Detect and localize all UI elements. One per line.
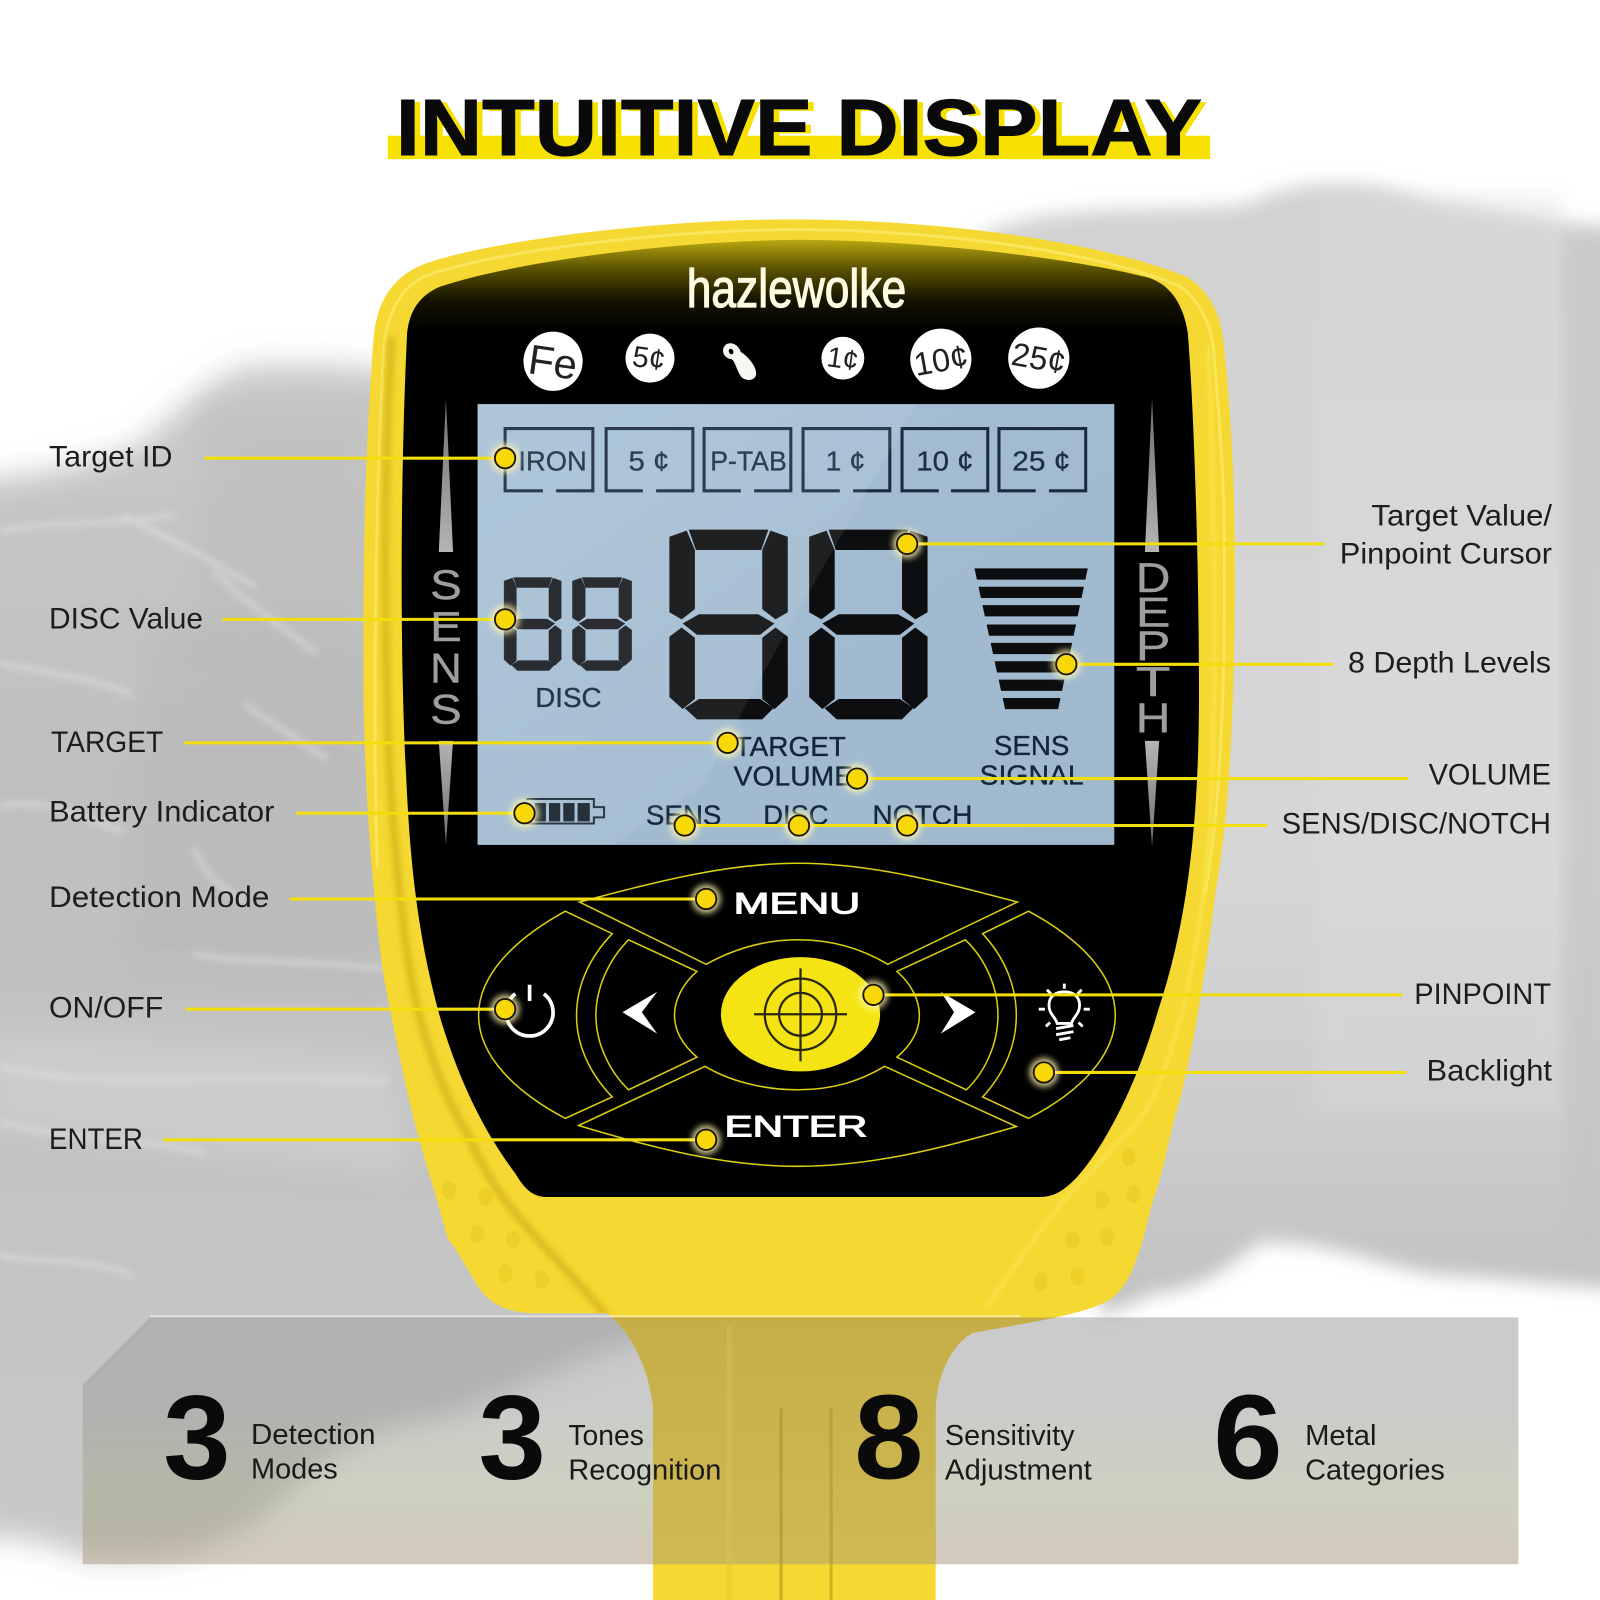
LCD text labels: DISC [763, 799, 829, 830]
right callout labels: Backlight [1427, 1055, 1552, 1088]
background: right forest landscape [980, 184, 1600, 1316]
stat: metal categories [1213, 1372, 1445, 1505]
stat: metal categories: Categories [1305, 1455, 1445, 1487]
leader lines [163, 458, 1408, 1140]
left callout labels: ENTER [49, 1123, 143, 1156]
detector body [363, 219, 1235, 1600]
battery icon [527, 799, 604, 823]
SENS side indicator: N [430, 645, 462, 692]
stat: tones recognition: 3 [479, 1372, 546, 1505]
left callout labels: DISC Value [49, 603, 203, 636]
icon: Fe: Fe [526, 335, 580, 389]
black control face [402, 240, 1199, 1197]
callout dots [491, 444, 1081, 1154]
stat: detection modes: Detection [251, 1419, 376, 1451]
DEPTH side indicator: H [1136, 695, 1170, 742]
background: left rocky landscape [0, 365, 653, 1559]
stat: tones recognition [479, 1372, 721, 1505]
left callout labels: TARGET [51, 726, 163, 759]
right callout labels: VOLUME [1429, 759, 1551, 792]
DEPTH side indicator [1136, 398, 1170, 847]
stat: metal categories: Metal [1305, 1420, 1377, 1452]
title with yellow highlight: INTUITIVE DISPLAY [396, 83, 1202, 172]
button: left [596, 940, 697, 1090]
target value large seven segment digits [669, 530, 928, 719]
SENS side indicator: E [430, 603, 462, 650]
target ID box labels: 5 ¢ [629, 445, 669, 476]
DEPTH side indicator: E [1136, 589, 1170, 636]
icon: light bulb [1039, 984, 1090, 1040]
icon: power [506, 985, 553, 1036]
icon: 25 cents: 25¢ [1009, 335, 1069, 381]
LCD text labels: SIGNAL [980, 760, 1084, 791]
icon: 5 cents: 5¢ [630, 340, 667, 377]
ENTER label: ENTER [724, 1111, 867, 1144]
target ID box labels: 10 ¢ [916, 445, 973, 476]
button: ENTER [579, 1066, 1016, 1166]
coin icons row [523, 328, 1069, 391]
stat: sensitivity adjustment: Adjustment [945, 1455, 1092, 1487]
left callout labels: Target ID [49, 440, 172, 473]
LCD text labels: SENS [646, 799, 721, 830]
icon: 10 cents: 10¢ [911, 337, 971, 383]
brand logo: hazlewolke [687, 259, 906, 319]
SENS side indicator: S [430, 561, 462, 608]
glass reflection [478, 404, 916, 845]
button: power [479, 911, 612, 1118]
right callout labels: 8 Depth Levels [1348, 646, 1551, 679]
icon: pull tab [723, 343, 756, 380]
button: MENU [580, 863, 1017, 964]
stat: sensitivity adjustment [854, 1372, 1092, 1505]
stat: detection modes: Modes [251, 1454, 338, 1486]
MENU label: MENU [734, 887, 860, 920]
pinpoint button with crosshair [721, 957, 880, 1071]
left callout labels: ON/OFF [49, 991, 163, 1024]
depth level bars [974, 568, 1088, 709]
SENS side indicator [430, 398, 462, 845]
SENS side indicator: S [430, 685, 462, 732]
LCD text labels: VOLUME [734, 761, 853, 792]
stat: sensitivity adjustment: Sensitivity [945, 1420, 1075, 1452]
button: backlight [983, 911, 1115, 1118]
DISC seven segment value [504, 578, 632, 671]
stat: tones recognition: Recognition [568, 1455, 721, 1487]
right callout labels: Target Value/ [1371, 500, 1553, 533]
target ID box labels [518, 445, 1070, 476]
LCD text labels: NOTCH [872, 799, 972, 830]
stat: metal categories: 6 [1213, 1372, 1283, 1505]
DEPTH side indicator: D [1136, 554, 1170, 601]
target ID box labels: P-TAB [710, 445, 787, 476]
target ID boxes [505, 429, 1086, 491]
right callout labels: PINPOINT [1414, 978, 1551, 1011]
button: right [897, 940, 998, 1090]
stat: sensitivity adjustment: 8 [854, 1372, 923, 1505]
icon: 5 cents [626, 334, 674, 383]
LCD text labels: TARGET [735, 731, 846, 762]
target ID box labels: IRON [518, 445, 587, 476]
left callout labels: Battery Indicator [49, 795, 275, 828]
panel: LCD screen [478, 404, 1114, 845]
right callout labels: SENS/DISC/NOTCH [1282, 808, 1551, 841]
stat: tones recognition: Tones [568, 1420, 644, 1452]
button outlines [479, 863, 1115, 1166]
title with yellow highlight: INTUITIVE DISPLAY [402, 85, 1208, 174]
DEPTH side indicator: T [1136, 658, 1170, 705]
stat: detection modes [163, 1372, 376, 1505]
DEPTH side indicator: P [1136, 622, 1170, 669]
target ID box labels: 25 ¢ [1012, 445, 1070, 476]
target ID box labels: 1 ¢ [826, 445, 865, 476]
right callout labels [1282, 500, 1553, 1088]
left callout labels: Detection Mode [49, 881, 269, 914]
DISC label: DISC [535, 682, 602, 713]
icon: right arrow [941, 992, 976, 1034]
icon: left arrow [622, 992, 657, 1034]
icon: 1 cent: 1¢ [825, 341, 861, 377]
LCD text labels [646, 730, 1084, 830]
left callout labels [49, 440, 275, 1156]
LCD text labels: SENS [994, 730, 1069, 761]
panel: bottom stats [83, 1316, 1518, 1564]
right callout labels: Pinpoint Cursor [1340, 537, 1552, 570]
stat: detection modes: 3 [163, 1372, 231, 1505]
